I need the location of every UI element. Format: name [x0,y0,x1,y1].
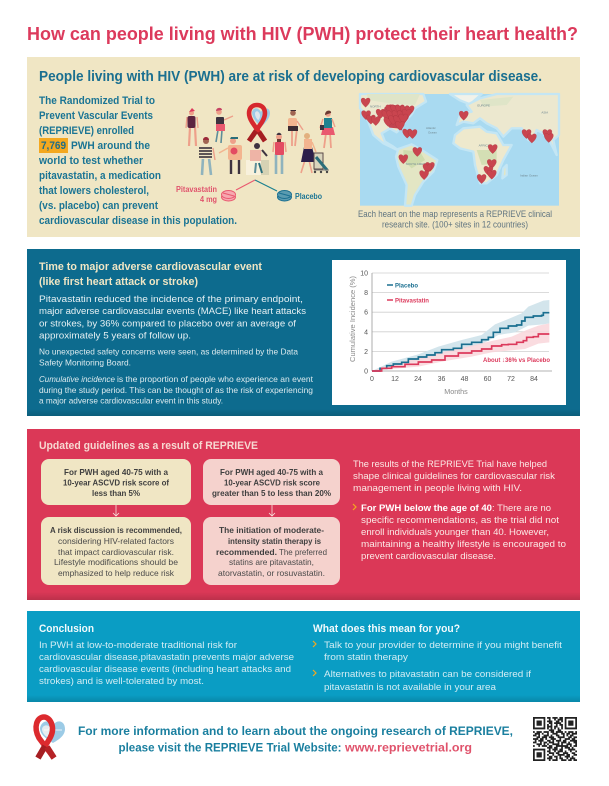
USA heart cluster [384,104,412,130]
person 4 [219,137,242,174]
person 7 [288,110,303,146]
map caption: research site. (100+ sites in 12 countries) [382,220,528,230]
y axis title: Cumulative Incidence (%) [348,275,357,362]
bullet: alternatives: pitavastatin is not available in your area [324,681,497,692]
map of trial sites: Atlantic [426,126,436,130]
text block: below age 40: For PWH below the age of 40 [361,503,492,513]
footer call to action: For more information and to learn about the ongoing research of REPRIEVE, [78,724,513,738]
bullet chevron [313,670,316,676]
y axis labels: 2 [364,349,368,356]
QR code [533,717,577,761]
y axis labels [360,270,368,376]
text block: cumulative incidence definition: during the study period. This can be thought of as the risk of experiencing [39,385,313,395]
person 5 seated on block [246,143,269,175]
footer call to action: www.reprievetrial.org [344,740,472,754]
text block: trial description: PWH around the [71,140,150,152]
panel heading: Time to major adverse cardiovascular event [39,261,262,273]
heart markers [361,98,553,184]
y axis labels: 0 [364,368,368,376]
panel heading [39,261,262,288]
text block: guideline summary: The results of the REPRIEVE Trial have helped [353,459,547,469]
guideline card: risk 5 to 20 percent: greater than 5 to less than 20% [212,489,332,498]
text block: below age 40 [361,503,566,561]
legend [387,282,429,304]
guideline card: risk below 5 percent: For PWH aged 40-75 with a [64,468,168,477]
chart annotation: About ↓36% vs Placebo [483,357,550,364]
recommendation card: risk discussion: considering HIV-related factors [58,537,174,546]
guideline card: risk below 5 percent: less than 5% [92,489,141,498]
text block: trial description [38,95,237,227]
map of trial sites: ASIA [541,111,548,115]
recommendation card: statin therapy: atorvastatin, or rosuvastatin. [218,569,325,578]
x axis labels: 12 [391,376,399,383]
text block: safety: Safety Monitoring Board. [39,358,131,368]
label: placebo: Placebo [295,192,322,201]
guideline card: risk 5 to 20 percent: For PWH aged 40-75 with a [220,468,323,477]
x axis labels: 36 [438,376,445,383]
text block: trial description: cardiovascular disease in this population. [39,215,237,227]
recommendation card: risk discussion: emphasized to help reduce risk [58,569,175,578]
bullet chevron [313,641,316,647]
footer call to action: please visit the REPRIEVE Trial Website: [118,740,342,754]
panel: updated guidelines [27,429,580,600]
conclusion text [39,639,294,686]
text block: cumulative incidence definition: is the proportion of people who experience an event [117,374,314,384]
text block: trial description: The Randomized Trial to [39,95,155,107]
x axis labels: 48 [461,376,468,383]
text block: primary endpoint [39,294,306,342]
text block: primary endpoint: Pitavastatin reduced the incidence of the primary endpoint, [39,294,303,305]
bullet: talk to your provider: Talk to your provider to determine if you might benefit [324,639,562,650]
text block: trial description: pitavastatin, a medication [39,170,161,182]
icon: placebo pill [278,190,292,201]
text block: cumulative incidence definition [39,374,314,406]
bullet: talk to your provider: from statin therapy [324,651,408,662]
text block: below age 40: maintaining a healthy lifestyle is encouraged to [361,539,566,549]
x axis title: Months [444,387,468,396]
text block: trial description: world to test whether [38,155,143,167]
panel: conclusion and what it means [27,611,580,702]
text block: primary endpoint: major adverse cardiovascular events (MACE) like heart attacks [39,306,306,317]
legend: Pitavastatin [395,298,429,304]
recommendation card: risk discussion: A risk discussion is recommended, [50,526,182,535]
recommendation card: risk discussion [41,517,191,585]
text block: guideline summary: shape clinical guidelines for cardiovascular risk [353,471,555,481]
chart card [332,260,566,405]
recommendation card: statin therapy: intensity statin therapy is [228,537,321,546]
x axis labels: 24 [414,376,422,383]
text block: below age 40: prevent cardiovascular disease. [361,551,496,561]
title: How can people living with HIV (PWH) protect their heart health? [27,23,578,44]
what does this mean heading: What does this mean for you? [313,623,460,635]
map caption [358,209,552,230]
text block: cumulative incidence definition: Cumulative incidence [39,374,115,384]
text block: below age 40: enroll individuals younger than 40. However, [361,527,549,537]
x axis labels [370,376,538,383]
map of trial sites: Ocean [428,130,437,134]
text block: guideline summary [353,459,555,493]
footer call to action [78,724,513,754]
x axis labels: 84 [530,376,538,383]
line chart: cumulative incidence [348,270,552,396]
y axis labels: 8 [364,290,368,297]
recommendation card: statin therapy: The initiation of moderate- [219,526,324,535]
text block: trial description: Prevent Vascular Events [39,110,153,122]
text block: safety [39,346,298,368]
icon: pitavastatin pill [222,190,236,201]
x axis labels: 60 [484,376,491,383]
y axis labels: 10 [360,270,368,278]
arrow down [113,505,119,516]
y axis labels: 4 [364,329,368,336]
map of trial sites: AFRICA [479,144,490,148]
recommendation card: statin therapy: The preferred [279,548,327,557]
text block: primary endpoint: approximately 5 years of follow up. [39,330,191,342]
panel heading: People living with HIV (PWH) are at risk of developing cardiovascular disease. [39,69,542,85]
pitavastatin curve [372,334,549,371]
x axis labels: 0 [370,376,374,383]
map of trial sites [360,94,559,206]
text block: trial description: that lowers cholesterol, [39,185,149,197]
bullet: alternatives: Alternatives to pitavastatin can be considered if [324,668,531,679]
conclusion text: cardiovascular disease events (including heart attacks and [39,663,291,674]
placebo curve [372,313,549,371]
label: pitavastatin 4 mg: 4 mg [200,195,217,204]
guideline card: risk below 5 percent [41,459,191,505]
y axis labels: 6 [364,310,368,317]
text block: guideline summary: management in people living with HIV. [353,483,522,493]
label: pitavastatin 4 mg: Pitavastatin [176,185,217,194]
guideline card: risk 5 to 20 percent: 10-year ASCVD risk score [224,478,320,488]
text block: trial description: 7,769 [41,140,66,152]
panel heading: Updated guidelines as a result of REPRIEVE [39,440,258,452]
map of trial sites: SOUTH AMERICA [406,162,430,166]
illustration: group of people [186,108,335,175]
icon: ribbon with heart [249,105,270,141]
bullet: alternatives [324,668,531,692]
arrow down [269,505,275,516]
x axis labels: 72 [507,376,515,383]
text block: below age 40: : There are no [492,503,551,513]
text block: trial description: (REPRIEVE) enrolled [39,125,134,137]
legend: Placebo [395,282,418,290]
panel: risk of cardiovascular disease [27,57,580,237]
map of trial sites: Indian Ocean [520,173,538,177]
conclusion heading: Conclusion [39,623,94,635]
conclusion text: In PWH at low-to-moderate traditional risk for [39,639,237,650]
recommendation card: risk discussion: Lifestyle modifications should be [54,558,178,567]
recommendation card: statin therapy: statins are pitavastatin, [229,558,314,567]
person 2 [216,108,233,143]
person 9 with stroller [301,133,329,173]
randomisation lines [236,180,255,190]
panel heading: (like first heart attack or stroke) [39,276,198,288]
guideline card: risk 5 to 20 percent [203,459,340,505]
map caption: Each heart on the map represents a REPRIEVE clinical [358,209,552,219]
map of trial sites: NORTH [370,105,381,109]
guideline card: risk below 5 percent: 10-year ASCVD risk score of [63,478,169,488]
recommendation card: risk discussion: that impact cardiovascular risk. [58,548,174,557]
placebo line [255,180,277,191]
map of trial sites: EUROPE [477,104,490,108]
conclusion text: strokes) and is well-tolerated by most. [39,675,204,686]
text block: cumulative incidence definition: a major adverse cardiovascular event in this study. [39,396,223,406]
person 8 [320,111,335,148]
bullet: talk to your provider [324,639,562,662]
recommendation card: statin therapy: recommended. [216,548,277,557]
person 1 [186,108,198,146]
text block: primary endpoint: or strokes, by 36% compared to placebo over an average of [39,318,296,330]
person 6 [273,133,286,174]
conclusion text: cardiovascular disease,pitavastatin prevents major adverse [39,651,294,662]
icon: footer ribbon with heart [36,717,65,758]
text block: trial description: (vs. placebo) can prevent [39,200,158,212]
recommendation card: statin therapy [203,517,340,585]
text block: below age 40: specific recommendations, as the trial did not [361,515,559,525]
text block: safety: No unexpected safety concerns were seen, as determined by the Data [39,346,298,356]
bullet chevron [353,504,356,510]
panel: time to major adverse cardiovascular event [27,249,580,416]
person 3 [199,137,215,175]
label: pitavastatin 4 mg [176,185,217,204]
